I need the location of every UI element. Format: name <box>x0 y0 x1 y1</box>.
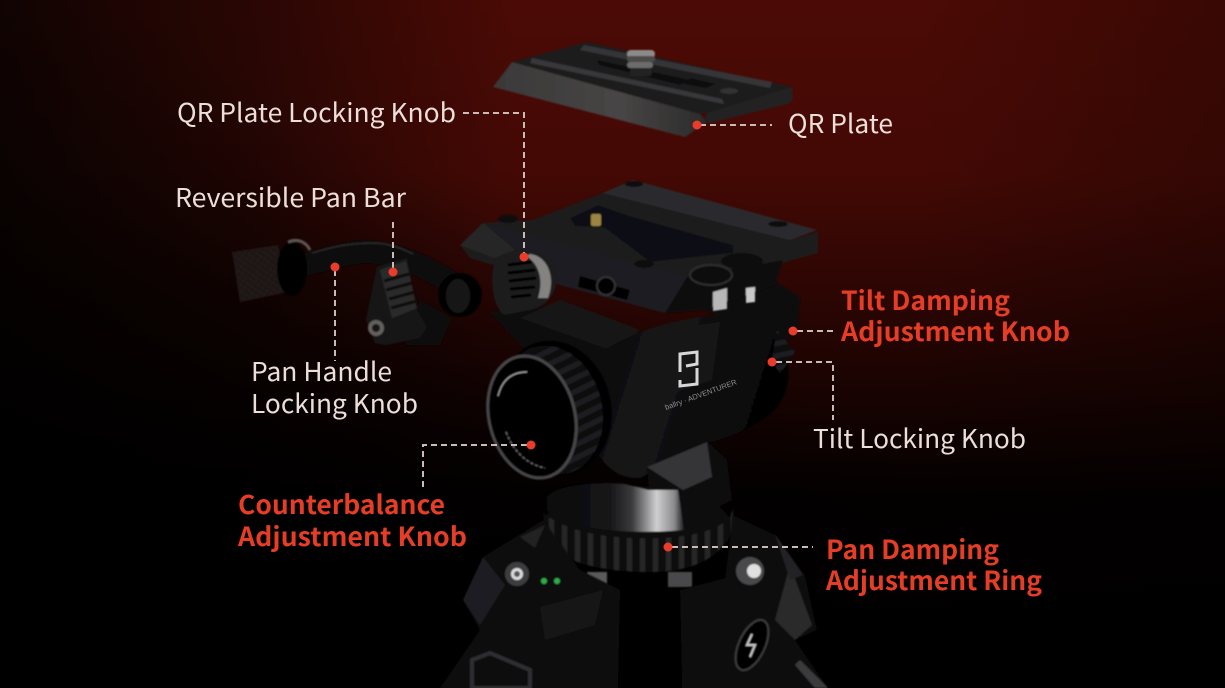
label: Pan Damping Adjustment Ring: Pan Damping <box>826 530 999 567</box>
icon: QR plate <box>493 42 793 137</box>
icon: brand logo <box>680 352 697 386</box>
label: Counterbalance Adjustment Knob: Adjustment Knob <box>237 517 467 554</box>
icon: counterbalance adjustment knob <box>475 328 626 488</box>
icon: QR plate locking knob <box>492 251 556 315</box>
label: QR Plate <box>692 104 893 141</box>
label: QR Plate: QR Plate <box>788 104 893 141</box>
label: QR Plate Locking Knob <box>177 93 528 262</box>
label: Tilt Locking Knob <box>768 358 1026 456</box>
label: Counterbalance Adjustment Knob <box>237 440 535 554</box>
icon: pan bar with grip <box>232 240 482 317</box>
label: Tilt Damping Adjustment Knob: Tilt Damping <box>841 281 1010 318</box>
icon: pan damping ring and base <box>542 441 733 587</box>
label: Tilt Locking Knob: Tilt Locking Knob <box>813 419 1026 456</box>
label: Tilt Damping Adjustment Knob: Adjustment Knob <box>840 312 1070 349</box>
label: QR Plate Locking Knob: QR Plate Locking Knob <box>177 93 456 130</box>
icon: tripod head platform <box>460 180 818 313</box>
label: Pan Handle Locking Knob: Pan Handle <box>251 352 392 389</box>
label: Tilt Damping Adjustment Knob <box>788 281 1070 349</box>
icon: pan handle locking knob <box>366 258 452 345</box>
icon: yoke arms and head body <box>490 280 800 478</box>
label: Pan Damping Adjustment Ring <box>664 530 1042 598</box>
icon: tripod legs and spider <box>440 515 828 688</box>
text: model mark on body: ballry · ADVENTURER <box>664 377 739 412</box>
label: Counterbalance Adjustment Knob: Counterbalance <box>238 485 445 522</box>
label: Pan Handle Locking Knob <box>251 262 418 421</box>
label: Pan Damping Adjustment Ring: Adjustment Ring <box>825 561 1042 598</box>
label: Reversible Pan Bar: Reversible Pan Bar <box>175 178 407 215</box>
label: Reversible Pan Bar <box>175 178 407 276</box>
label: Pan Handle Locking Knob: Locking Knob <box>251 384 418 421</box>
